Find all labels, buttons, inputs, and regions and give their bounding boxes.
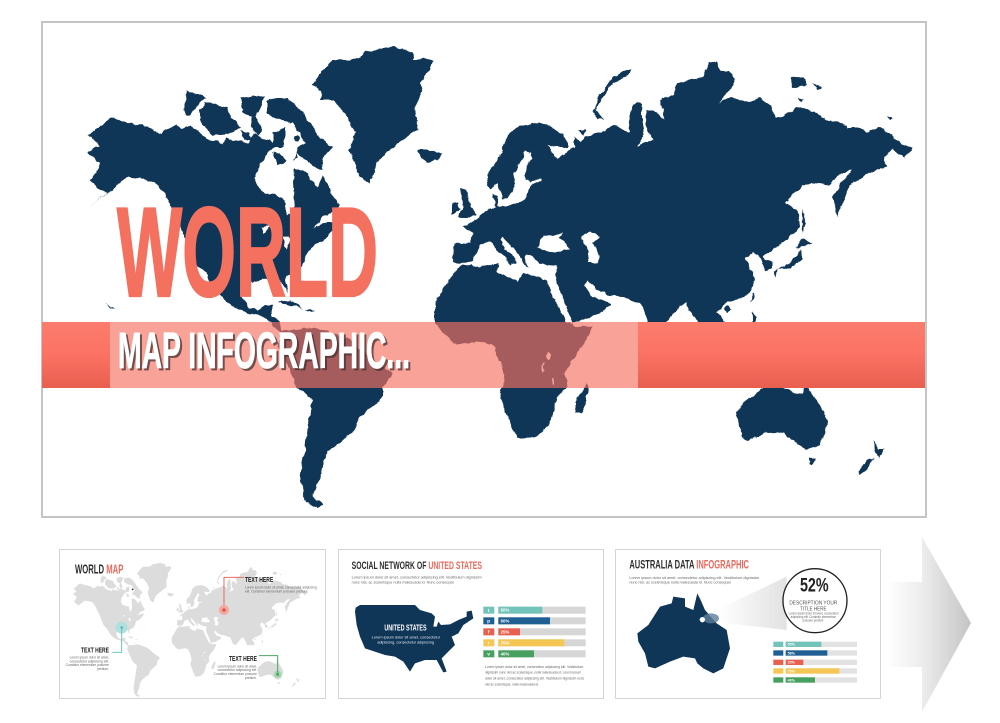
body text: dolor sit amet, consectetur adipiscing elit. Vestibulum dignissim nunc [485,676,584,680]
water bodies [262,135,600,386]
body text: Lorem ipsum dolor sit amet, consectetur adipiscing elit. Vestibulum [485,665,583,669]
bar: facebook [483,628,586,636]
callout: teal marker: consectetur adipiscing elit. [70,659,109,663]
bar: facebook: f [488,630,490,636]
title: WORLD: WORLD [117,181,378,323]
map highlight [703,613,719,623]
bar: teal: 50% [788,643,796,647]
callout: teal marker: Lorem ipsum dolor sit amet, [70,656,109,660]
callout: teal marker: Curabitur elementum posuere [66,663,109,667]
body text: dignissim nunc nisi ac scelerisque, nulla malesuada id. Lorem ipsum [485,671,581,675]
callout: green marker [214,654,281,680]
callout: green marker: TEXT HERE [229,654,257,663]
callout circle: 52%: posuere pretium [803,619,823,623]
callout: red marker [219,575,317,615]
map: United States: UNITED STATES [384,623,427,633]
bar: rss: 75% [501,640,509,645]
bar: twitter: t [488,608,490,614]
panel: thumbnail Australia data [616,550,880,698]
bar: rss [483,639,586,647]
callout: teal marker: TEXT HERE [81,645,109,654]
bar: link [483,650,586,658]
bar: pinterest [483,617,586,625]
bar: yellow: 75% [788,669,796,673]
bar: rss: r [488,641,490,647]
callout circle: 52%: TITLE HERE [800,607,827,613]
map: United States [355,605,473,672]
panel: main slide [42,22,926,517]
subtitle: MAP INFOGRAPHIC: MAP INFOGRAPHIC... [118,322,410,379]
heading: world map: WORLD MAP [75,562,124,576]
callout: teal marker [66,622,128,671]
callout circle: 52%: DESCRIPTION YOUR [789,601,837,607]
bar: green: 40% [788,678,796,682]
intro text: nunc nisi, ac scelerisque nulla malesuada id. Nunc consequat [629,581,731,585]
map: United States: adipiscing, consectetur adipiscing [377,640,434,644]
callout: teal marker: pretium. [97,667,109,671]
bar: link: v [487,652,490,658]
callout: green marker: consectetur adipiscing elit. [218,668,257,672]
magnifier cone [718,577,787,630]
body text: nisi ac scelerisque, nulla malesuada id. [485,682,539,686]
bar: blue: 58% [788,651,796,655]
body text [485,665,584,686]
heading: Australia data: AUSTRALIA DATA INFOGRAPHIC [629,557,749,571]
arrow: next [887,537,971,712]
panel: thumbnail social network [338,550,604,698]
callout circle: 52%: 52% [800,576,829,597]
map: United States: Lorem ipsum dolor sit amet, consectetur [372,635,441,639]
callout: red marker: Lorem ipsum dolor sit amet, consectetur adipiscing [245,585,317,589]
heading: social network: SOCIAL NETWORK OF UNITED STATES [352,560,482,572]
bar: link: 40% [501,651,509,656]
callout: green marker: pretium. [245,676,257,680]
bar chart: social networks [483,607,586,658]
map marker [700,617,705,622]
grey world map [73,563,307,697]
callout: green marker: Lorem ipsum dolor sit amet, [218,664,257,668]
callout: red marker: elit. Curabitur elementum posuere pretium. [245,590,308,594]
bar: pinterest: 60% [501,618,509,623]
intro text: Lorem ipsum dolor sit amet, consectetur adipiscing elit. Vestibulum dignissim [629,576,759,580]
intro text [629,576,759,585]
map: Australia [637,593,730,673]
bar: facebook: 25% [501,629,509,634]
callout: red marker: TEXT HERE [245,575,273,584]
callout circle: 52%: adipiscing elit. Curabitur elementum [791,615,836,619]
bar: twitter: 50% [501,608,509,613]
banner [42,322,925,388]
bar: red: 25% [788,661,796,665]
world map [87,47,912,508]
thumbnail labels [66,562,317,680]
intro text: nunc nisi, ac scelerisque nulla malesuada id. Nunc consequat [352,580,454,584]
callout circle: 52% [783,569,847,633]
bar: pinterest: p [487,619,490,625]
bar chart: Australia data [773,642,857,683]
callout: green marker: Curabitur elementum posuere [214,672,257,676]
intro text [352,576,482,584]
panel: thumbnail world map [60,550,326,698]
bar: twitter [483,607,586,614]
callout circle: 52%: Lorem ipsum dolor sit amet, consectetur [789,611,839,615]
intro text: Lorem ipsum dolor sit amet, consectetur adipiscing elit. Vestibulum dignissim [352,576,482,580]
